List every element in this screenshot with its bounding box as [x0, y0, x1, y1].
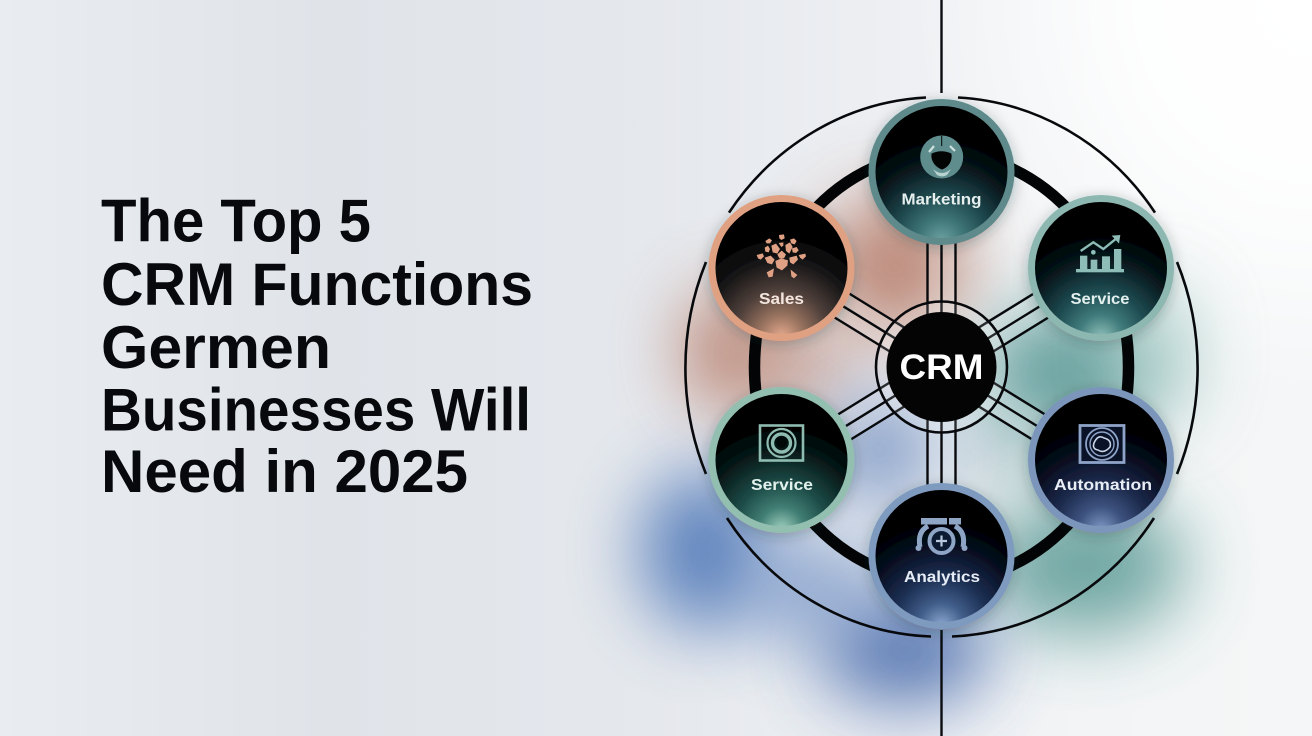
vertical axis line: top — [940, 0, 943, 93]
hub: CRM: CRM — [900, 348, 984, 387]
node: Service (chart) — [1032, 198, 1170, 338]
hub: CRM — [876, 302, 1007, 432]
title — [101, 188, 533, 505]
label: Service: Service — [1070, 291, 1130, 308]
label: Service: Service — [751, 477, 813, 494]
node: Sales — [712, 198, 851, 338]
label: Analytics: Analytics — [904, 569, 980, 586]
icon: sales cluster — [757, 234, 806, 278]
thick inner ring — [754, 153, 1128, 581]
title: The Top 5 — [101, 188, 371, 254]
icon: rising bar chart — [1076, 235, 1124, 272]
node: Automation — [1032, 390, 1170, 530]
label: Marketing: Marketing — [902, 192, 982, 208]
title: Need in 2025 — [101, 438, 468, 505]
icon: framed dial — [760, 426, 803, 460]
vertical axis line: bottom — [940, 630, 943, 736]
title: CRM Functions — [101, 251, 533, 318]
icon: framed gear — [1080, 426, 1124, 462]
label: Automation: Automation — [1054, 477, 1152, 494]
icon: marketing face badge — [920, 136, 963, 178]
icon: dial with arrows — [916, 518, 968, 553]
title: Businesses Will — [101, 376, 531, 444]
label: Sales: Sales — [759, 291, 804, 308]
colour glows behind diagram — [640, 193, 1195, 705]
title: Germen — [101, 314, 331, 381]
outer ring arcs — [685, 98, 1198, 636]
node: Service (monitor) — [712, 390, 851, 530]
connectors between hub and satellites — [807, 217, 1076, 517]
node: Analytics — [872, 486, 1011, 626]
node: Marketing — [872, 102, 1011, 242]
